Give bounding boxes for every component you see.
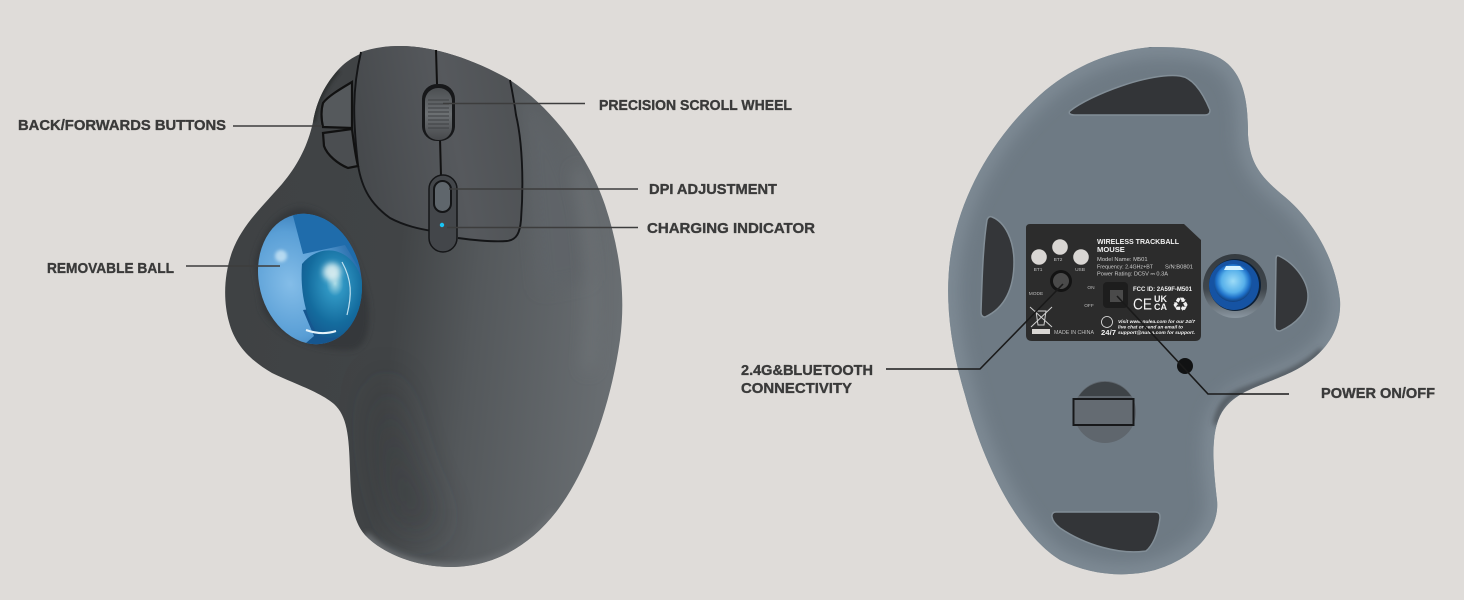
- product label: S/N:B0801: [1165, 264, 1193, 270]
- body shading: [313, 70, 592, 567]
- BT buttons: USB: [1075, 267, 1085, 273]
- BT buttons: BT1: [1034, 267, 1043, 273]
- support note: [1101, 316, 1195, 337]
- DPI capsule with button: [429, 175, 457, 252]
- support note: live chat or send an email to: [1118, 324, 1183, 330]
- scroll wheel top wedge: [1103, 47, 1157, 64]
- battery door: [1074, 381, 1136, 443]
- callout: back/forwards buttons: BACK/FORWARDS BUTTONS: [18, 117, 226, 134]
- FCC ID: FCC ID: 2A59F-M501: [1133, 286, 1192, 293]
- compliance marks: [1133, 294, 1189, 316]
- compliance marks: CE: [1133, 296, 1152, 314]
- left glide pad: [981, 217, 1014, 317]
- label title: WIRELESS TRACKBALL: [1097, 237, 1179, 246]
- top button panel seam: [354, 52, 522, 241]
- recycling bin mark: [1030, 307, 1052, 334]
- product label: ON: [1087, 285, 1095, 291]
- product label: MADE IN CHINA: [1054, 330, 1094, 336]
- mode button: [1050, 270, 1072, 292]
- callout: charging indicator: CHARGING INDICATOR: [647, 220, 815, 237]
- edge shading: [948, 47, 1340, 574]
- top button panel: [354, 46, 522, 241]
- compliance marks: ♻: [1172, 295, 1189, 316]
- product label: OFF: [1084, 303, 1094, 309]
- trackball: [258, 214, 362, 344]
- scroll wheel: [422, 84, 455, 141]
- back and forward side buttons: [322, 82, 358, 168]
- callout: 2.4G and Bluetooth connectivity: CONNECTIVITY: [741, 380, 852, 397]
- trackball window: [1203, 254, 1267, 318]
- back view mouse: [948, 47, 1340, 574]
- product label: MODE: [1029, 291, 1043, 297]
- callout: 2.4G and Bluetooth connectivity: [741, 284, 1063, 397]
- charging LED: [440, 223, 444, 227]
- underside body: [948, 47, 1340, 574]
- power switch: [1103, 282, 1128, 308]
- callout: DPI adjustment: DPI ADJUSTMENT: [649, 181, 777, 198]
- screw hole: [1177, 358, 1193, 374]
- front view mouse: [225, 46, 622, 567]
- product label: [1026, 224, 1201, 341]
- BT buttons: BT2: [1054, 257, 1063, 263]
- mouse body: [225, 46, 622, 567]
- callout: 2.4G and Bluetooth connectivity: 2.4G&BLUETOOTH: [741, 362, 873, 379]
- DPI button: [434, 181, 451, 212]
- product label: MOUSE: [1097, 245, 1125, 254]
- callout: power on/off: POWER ON/OFF: [1321, 385, 1435, 402]
- bottom glide pad: [1052, 512, 1160, 552]
- support note: support@nulea.com for support.: [1118, 330, 1195, 335]
- support note: 24/7: [1101, 328, 1116, 337]
- BT buttons: [1031, 239, 1089, 273]
- top glide pad: [1069, 76, 1210, 115]
- compliance marks: CA: [1154, 302, 1167, 312]
- center seam: [436, 50, 441, 176]
- label specs: Model Name: M501: [1097, 257, 1148, 263]
- product label: Frequency: 2.4GHz+BT: [1097, 264, 1153, 270]
- compliance marks: UK: [1154, 294, 1167, 304]
- right glide pad: [1275, 256, 1308, 331]
- product label: Power Rating: DC5V ⎓ 0.3A: [1097, 272, 1168, 278]
- callout: precision scroll wheel: PRECISION SCROLL WHEEL: [599, 97, 792, 114]
- support note: Visit www.nulea.com for our 24/7: [1118, 319, 1195, 324]
- callout: removable ball: REMOVABLE BALL: [47, 260, 174, 277]
- trackball socket: [254, 208, 369, 350]
- callout: power on/off: [1117, 296, 1435, 402]
